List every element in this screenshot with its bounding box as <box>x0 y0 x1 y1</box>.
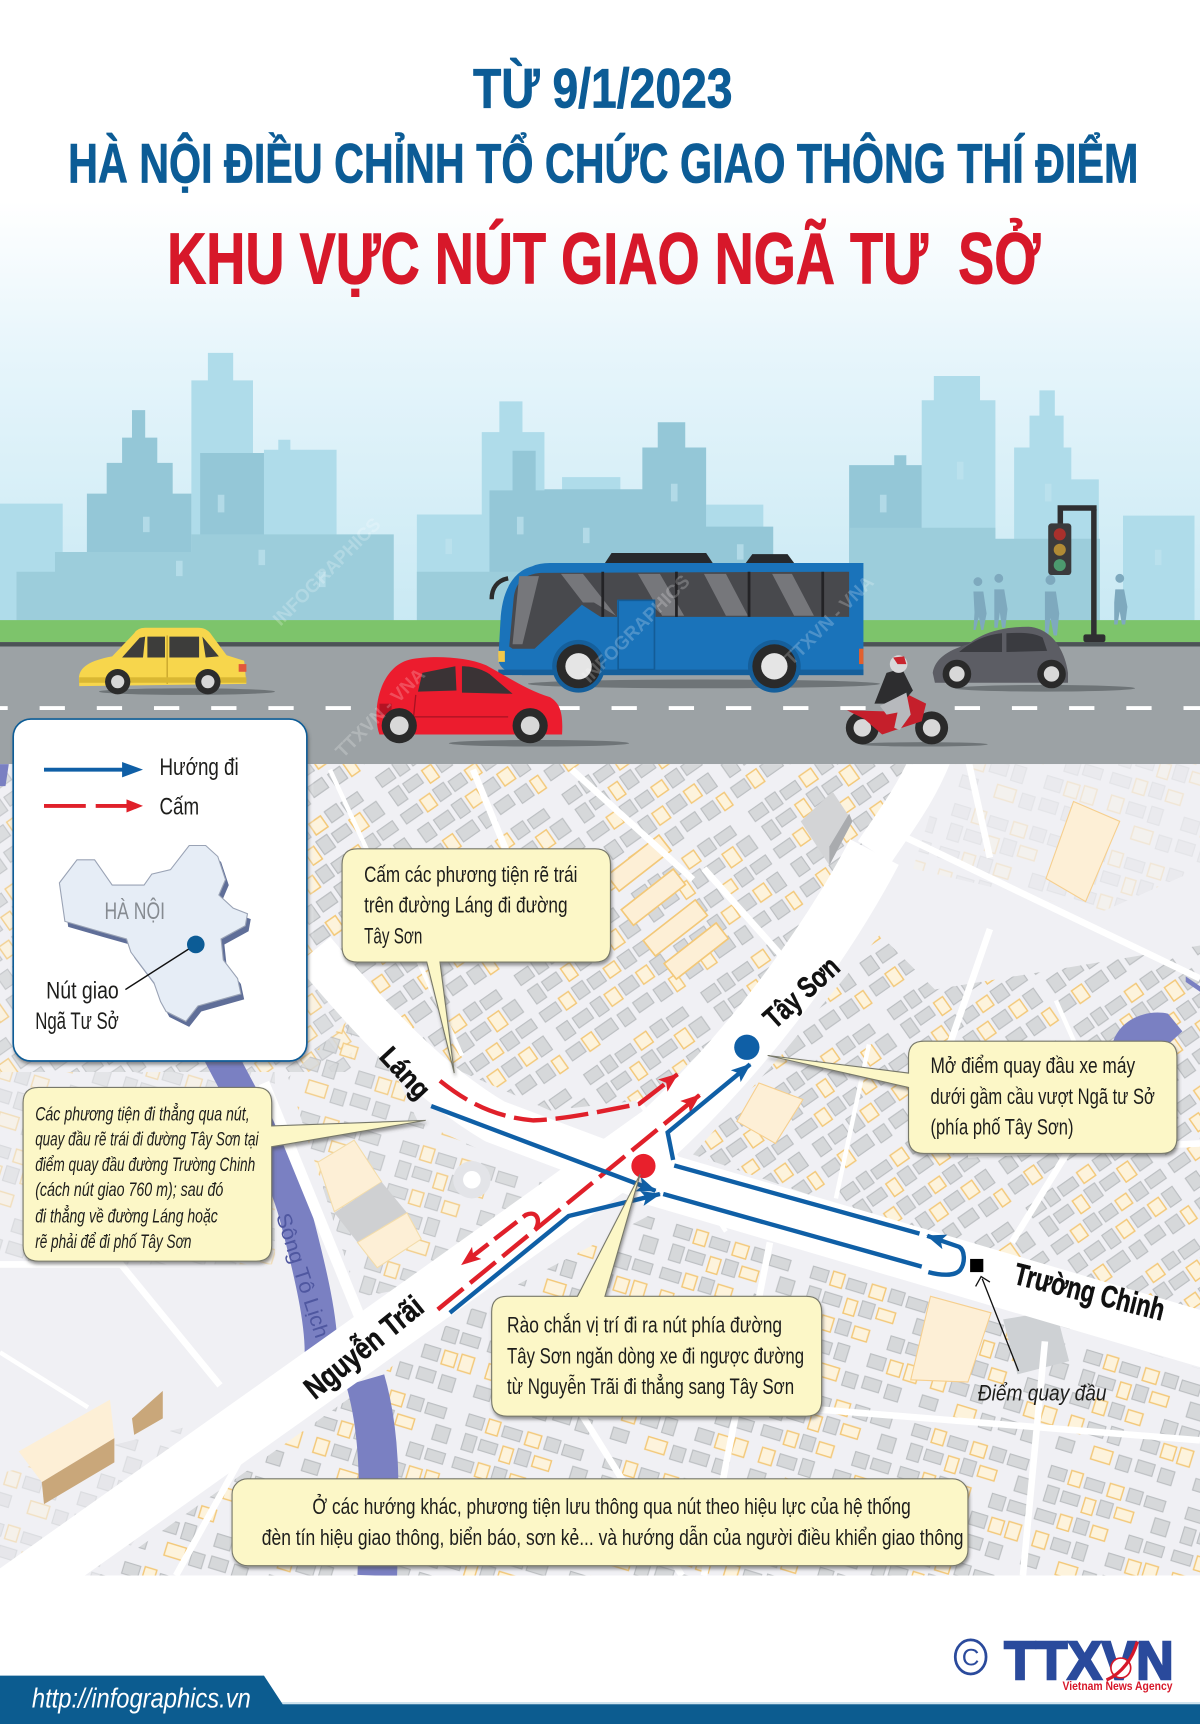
direction: Nguyễn Trãi to Trường Chinh <box>450 1194 660 1313</box>
vehicle: blue bus <box>492 553 880 693</box>
callout: barrier: từ Nguyễn Trãi đi thẳng sang Tây Sơn <box>507 1374 794 1399</box>
background sky <box>0 0 1200 649</box>
callout: motorbike U-turn: (phía phố Tây Sơn) <box>931 1115 1074 1140</box>
direction: U-turn point on Trường Chinh <box>927 1236 964 1275</box>
callout: straight through then U-turn: điểm quay đầu đường Trường Chinh <box>35 1155 255 1176</box>
map background <box>0 764 1200 1576</box>
callout: no left turn: Cấm các phương tiện rẽ trái <box>364 862 577 887</box>
logo TTXVN: TTXVN <box>1004 1631 1174 1691</box>
watermark texts: TTXVN - VNA <box>331 664 429 761</box>
grass strip <box>0 620 1200 643</box>
watermark texts: INFOGRAPHICS <box>578 571 694 687</box>
logo TTXVN: Vietnam News Agency <box>1063 1679 1173 1693</box>
footer band <box>0 1676 1200 1724</box>
legend: forbidden arrow: Cấm <box>159 794 199 821</box>
callout: no left turn: Tây Sơn <box>364 923 422 948</box>
map buildings: large blocks <box>19 792 1120 1504</box>
label: Ngã Tư Sở junction <box>35 977 119 1035</box>
label: Ngã Tư Sở junction: Ngã Tư Sở <box>35 1008 119 1035</box>
legend panel <box>13 719 307 1061</box>
footer band: http://infographics.vn <box>32 1683 251 1714</box>
forbidden: Nguyễn Trãi straight to Tây Sơn <box>438 1095 700 1309</box>
map: roads <box>0 748 1200 1594</box>
location dot: barrier <box>631 1154 656 1178</box>
traffic light <box>1048 508 1105 642</box>
label: Ngã Tư Sở junction: Nút giao <box>46 977 119 1004</box>
traffic arrows <box>431 1064 964 1313</box>
road label: Tây Sơn: Tây Sơn <box>757 950 846 1035</box>
Hanoi map <box>59 846 251 1027</box>
pointer arrow to U-turn point <box>976 1277 1019 1371</box>
U-turn point label: Điểm quay đầu <box>978 1381 1107 1406</box>
vehicle: motorbike <box>846 655 988 747</box>
city skyline <box>0 353 1195 622</box>
watermark texts: INFOGRAPHICS <box>268 513 385 630</box>
direction: to Tây Sơn <box>668 1064 750 1160</box>
logo TTXVN: C <box>962 1645 979 1672</box>
callout: motorbike U-turn <box>768 1041 1177 1153</box>
callout: other directions: Ở các hướng khác, phương tiện lưu thông qua nút theo hiệu lực của hệ thống <box>312 1494 911 1519</box>
callout: no left turn: trên đường Láng đi đường <box>364 893 568 918</box>
callout: straight through then U-turn <box>23 1087 426 1261</box>
callout: straight through then U-turn: quay đầu rẽ trái đi đường Tây Sơn tại <box>35 1130 259 1151</box>
direction: Trường Chinh outbound <box>663 1194 922 1267</box>
callout: motorbike U-turn: Mở điểm quay đầu xe máy <box>931 1053 1135 1078</box>
callout: straight through then U-turn: (cách nút giao 760 m); sau đó <box>35 1180 223 1201</box>
direction: Trường Chinh inbound <box>674 1165 920 1234</box>
callout: other directions <box>232 1479 968 1566</box>
forbidden: left turn from Láng to Tây Sơn <box>440 1074 678 1120</box>
legend: forbidden arrow <box>44 794 199 821</box>
direction: Láng to Trường Chinh <box>431 1106 656 1191</box>
road <box>0 642 1200 764</box>
road label: Láng: Láng <box>374 1040 437 1105</box>
vehicle: yellow car <box>79 628 275 695</box>
legend: direction arrow: Hướng đi <box>159 754 239 781</box>
map: river Tô Lịch and lakes <box>0 764 1200 1576</box>
vehicle: red car <box>376 657 629 747</box>
U-turn point marker <box>970 1259 983 1272</box>
forbidden: U-turn back toward Nguyễn Trãi <box>462 1214 538 1264</box>
callout: straight through then U-turn: Các phương tiện đi thẳng qua nút, <box>35 1103 250 1125</box>
callout: barrier <box>492 1174 822 1416</box>
callout: barrier: Tây Sơn ngăn dòng xe đi ngược đường <box>507 1343 804 1368</box>
river label: Sông Tô Lịch <box>271 1210 333 1341</box>
watermark texts: TTXVN - VNA <box>780 571 878 669</box>
pedestrians <box>973 574 1127 636</box>
callout: no left turn <box>342 849 610 1073</box>
callout: barrier: Rào chắn vị trí đi ra nút phía đường <box>507 1313 782 1338</box>
legend: direction arrow <box>44 754 239 781</box>
road label: Nguyễn Trãi: Nguyễn Trãi <box>297 1289 430 1406</box>
watermark texts <box>268 513 878 761</box>
title line: date: TỪ 9/1/2023 <box>473 57 733 120</box>
location dot: Tây Sơn U-turn <box>734 1035 759 1060</box>
callout: other directions: đèn tín hiệu giao thông, biển báo, sơn kẻ... và hướng dẫn của người điều khiển giao thông <box>262 1525 964 1550</box>
title <box>68 57 1138 300</box>
Hanoi map: HÀ NỘI <box>104 897 165 925</box>
callout: straight through then U-turn: rẽ phải để đi phố Tây Sơn <box>35 1232 191 1253</box>
footer white area <box>0 1576 1200 1724</box>
callout: straight through then U-turn: đi thẳng về đường Láng hoặc <box>35 1206 218 1228</box>
vehicle: gray car <box>933 627 1135 692</box>
